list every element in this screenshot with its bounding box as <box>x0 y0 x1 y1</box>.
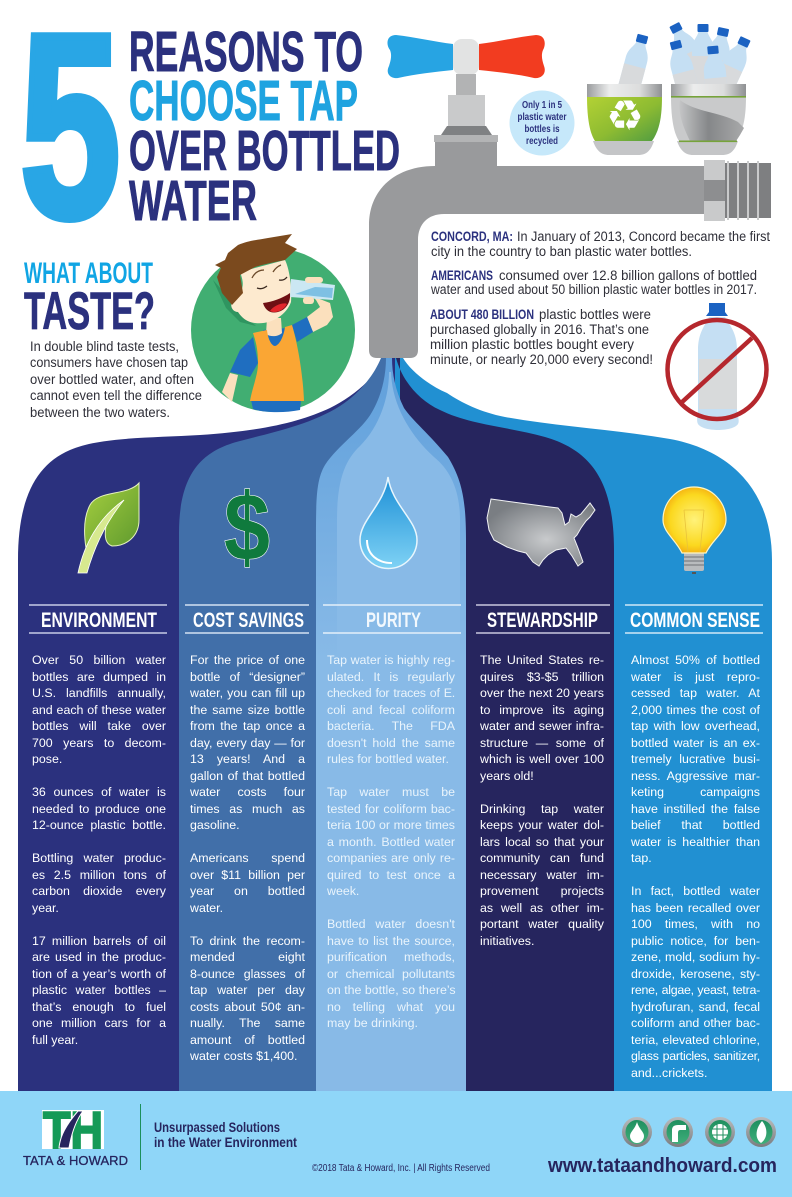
title: WATER <box>129 169 257 233</box>
boy: hair <box>215 234 297 305</box>
heading: purity: PURITY <box>366 608 421 632</box>
text block: cost savings: day, every day — for <box>190 736 305 750</box>
text block: stewardship: The United States re- <box>480 653 604 667</box>
text block: stewardship: lars local so that your <box>480 834 604 848</box>
boy: collar <box>263 328 287 347</box>
text block: purity: quired to test once a <box>327 868 455 882</box>
water stream: environment column <box>18 358 395 1091</box>
heading: stewardship: STEWARDSHIP <box>487 608 598 632</box>
text block: purity: rules for bottled water. <box>327 752 449 766</box>
text block: stewardship: which is well over 100 <box>480 752 604 766</box>
icon: dollar sign: $ <box>224 474 270 581</box>
text block: stewardship: portant water quality <box>480 917 604 931</box>
text block: environment: carbon dioxide every <box>32 884 166 898</box>
text block: cost savings: water costs $1,400. <box>190 1049 297 1063</box>
logo divider <box>140 1104 141 1170</box>
text block: common sense: 2,000 times the cost of <box>631 702 760 716</box>
text block: environment: bottles are dumped in <box>32 670 166 684</box>
text block: purity: Tap water must be <box>327 785 455 799</box>
text block: taste: over bottled water, and often <box>30 372 194 388</box>
logo wordmark: TATA & HOWARD <box>23 1153 128 1168</box>
text block: environment: and each of these water <box>32 702 166 716</box>
tagline <box>154 1119 297 1150</box>
text block: taste <box>30 339 202 421</box>
text block: stewardship <box>480 653 604 948</box>
text block: taste: cannot even tell the difference <box>30 388 202 404</box>
text block: common sense: belief that bottled <box>631 818 760 832</box>
boy: vest <box>250 325 304 401</box>
text block: cost savings: amount of bottled <box>190 1032 305 1046</box>
text block: environment: full year. <box>32 1032 78 1046</box>
text block: common sense: zene, mold, sodium hy- <box>631 950 760 964</box>
heading: stewardship <box>476 605 610 633</box>
boy: sleeves <box>230 337 258 377</box>
icon: pipe badge <box>663 1117 693 1147</box>
text block: cost savings: For the price of one <box>190 653 305 667</box>
text block: common sense: glass particles, sanitizer, <box>631 1049 760 1063</box>
text block: purity: ulated. It is regularly <box>327 670 455 684</box>
water stream: common sense column <box>395 358 772 1091</box>
text block: stewardship: quires $3-$5 trillion <box>480 670 604 684</box>
text block: environment: plastic water bottles – <box>32 983 166 997</box>
text block: stewardship: water and sewer infra- <box>480 719 604 733</box>
text block: environment: one million cars for a <box>32 1016 166 1030</box>
text block: facts <box>430 228 770 368</box>
heading: what about taste <box>24 257 155 341</box>
text block: common sense: hydrofuran, sand, fecal <box>631 1000 760 1014</box>
title <box>129 20 400 233</box>
text block: taste: consumers have chosen tap <box>30 355 188 371</box>
text block: cost savings: costs about 50¢ an- <box>190 1000 305 1014</box>
fact: Americans <box>430 267 757 298</box>
faucet pipe <box>369 142 704 358</box>
fact: about 480 billion: minute, or nearly 20,000 every second! <box>430 352 653 368</box>
heading: what about taste: WHAT ABOUT <box>24 257 153 290</box>
text block: cost savings: nually. The same <box>190 1016 305 1030</box>
footer band <box>0 1091 792 1197</box>
text block: common sense: In fact, bottled water <box>631 884 760 898</box>
text block: environment: 12-ounce plastic bottle. <box>32 818 166 832</box>
text block: purity: Tap water is highly reg- <box>327 653 455 667</box>
callout: only 1 in 5 recycled <box>510 90 574 156</box>
text block: environment <box>32 653 166 1046</box>
text block: common sense: Almost 50% of bottled <box>631 653 760 667</box>
fact: Concord: CONCORD, MA: <box>431 228 513 244</box>
text block: cost savings: gasoline. <box>190 818 240 832</box>
text block: purity: on the bottle, so there’s <box>327 983 456 997</box>
text block: common sense: cessed tap water. At <box>631 686 760 700</box>
text block: common sense: tap with low overhead, <box>631 719 760 733</box>
text block: cost savings: Americans spend <box>190 851 305 865</box>
text block: environment: tion of a year’s worth of <box>32 966 166 980</box>
text block: stewardship: provement projects <box>480 884 604 898</box>
text block: cost savings <box>190 653 306 1063</box>
boy: left arm <box>222 373 238 402</box>
boy: eyes <box>257 277 287 289</box>
text block: cost savings: gallon of that bottled <box>190 768 305 782</box>
text block: purity: purification methods, <box>327 950 455 964</box>
text block: purity: week. <box>327 884 359 898</box>
text block: environment: pose. <box>32 752 62 766</box>
text block: environment: bottles will take over <box>32 719 166 733</box>
text block: purity: Bottled water doesn't <box>327 917 455 931</box>
text block: common sense: water is healthier than <box>631 834 760 848</box>
text block: cost savings: tap water per day <box>190 983 305 997</box>
text block: purity: may be drinking. <box>327 1016 418 1030</box>
text block: stewardship: as well as other im- <box>480 900 604 914</box>
fact: about 480 billion <box>430 306 653 368</box>
text block: common sense: public notice, for ben- <box>631 934 760 948</box>
icon: water drop badge <box>622 1117 652 1147</box>
text block: environment: that’s enough to fuel <box>32 1000 166 1014</box>
text block: common sense: and...crickets. <box>631 1066 707 1080</box>
logo: Tata and Howard <box>23 1102 128 1168</box>
text block: stewardship: years old! <box>480 768 534 782</box>
text block: cost savings: bottle of “designer” <box>190 670 305 684</box>
boy: mouth <box>263 293 290 313</box>
boy: bottom of shirt <box>251 400 301 412</box>
icon: light bulb <box>663 487 726 574</box>
text block: stewardship: keeps your water dol- <box>480 818 604 832</box>
heading: what about taste: TASTE? <box>24 282 155 341</box>
text block: cost savings: the same size bottle <box>190 702 305 716</box>
faucet stem <box>434 74 498 142</box>
heading: environment <box>29 605 167 633</box>
heading: environment: ENVIRONMENT <box>41 608 157 632</box>
text block: cost savings: over $11 billion per <box>190 868 305 882</box>
icon: trash bin with many bottles <box>664 19 756 155</box>
text block: cost savings: water, you can fill up <box>190 686 305 700</box>
text block: common sense: bottled water is an ex- <box>631 736 760 750</box>
service icons <box>622 1117 776 1147</box>
text block: environment: 17 million barrels of oil <box>32 934 166 948</box>
boy: raised arm <box>307 296 333 332</box>
text block: common sense: teria, elevated chlorine, <box>631 1032 760 1046</box>
website: www.tataandhoward.com <box>547 1155 777 1177</box>
tagline: in the Water Environment <box>154 1134 297 1150</box>
title: CHOOSE TAP <box>129 69 358 133</box>
faucet handle <box>388 35 545 78</box>
text block: cost savings: 8-ounce glasses of <box>190 966 305 980</box>
boy: brows <box>252 265 281 278</box>
text block: environment: Over 50 billion water <box>32 653 166 667</box>
text block: common sense <box>631 653 760 1080</box>
text block: common sense: coliform and other bac- <box>631 1016 760 1030</box>
text block: stewardship: Drinking tap water <box>480 802 604 816</box>
icon: USA map <box>487 499 595 566</box>
icon: water drop <box>360 477 417 568</box>
text block: common sense: tremely lucrative busi- <box>631 752 760 766</box>
text block: common sense: rene, algae, yeast, tetra- <box>631 983 760 997</box>
text block: cost savings: water. <box>190 900 223 914</box>
title: OVER BOTTLED <box>129 119 400 183</box>
text block: environment: U.S. landfills annually, <box>32 686 166 700</box>
text block: environment: year. <box>32 900 59 914</box>
text block: cost savings: mended eight <box>190 950 305 964</box>
tagline: Unsurpassed Solutions <box>154 1119 280 1135</box>
text block: cost savings: 13 years! And a <box>190 752 305 766</box>
text block: stewardship: initiatives. <box>480 934 534 948</box>
water stream: stewardship column <box>396 358 614 1091</box>
text block: purity: doesn't hold the same <box>327 736 455 750</box>
icon: no plastic bottles <box>668 303 766 430</box>
text block: environment: es 2.5 million tons of <box>32 868 166 882</box>
text block: purity: bacteria. The FDA <box>327 719 455 733</box>
text block: cost savings: from the tap once a <box>190 719 305 733</box>
callout: only 1 in 5 recycled: recycled <box>526 135 558 147</box>
text block: purity: a month. Bottled water <box>327 834 455 848</box>
text block: purity: or chemical pollutants <box>327 966 455 980</box>
water stream: purity inner highlight <box>337 372 460 1091</box>
callout: only 1 in 5 recycled: bottles is <box>524 123 560 135</box>
icon: globe badge <box>705 1117 735 1147</box>
boy: glass of water <box>290 277 335 304</box>
icon: leaf badge <box>746 1117 776 1147</box>
fact: about 480 billion: ABOUT 480 BILLION <box>430 306 534 322</box>
text block: purity: tested for coliform bac- <box>327 802 455 816</box>
callout: only 1 in 5 recycled: Only 1 in 5 <box>522 99 562 111</box>
text block: taste: between the two waters. <box>30 405 170 421</box>
fact: Concord <box>431 228 770 260</box>
boy: head <box>231 260 291 323</box>
text block: common sense: tap. <box>631 851 652 865</box>
text block: common sense: has been recalled over <box>631 900 760 914</box>
text block: stewardship: necessary water im- <box>480 868 604 882</box>
text block: cost savings: year on bottled <box>190 884 305 898</box>
text block: environment: Bottling water produc- <box>32 851 166 865</box>
heading: cost savings <box>185 605 309 633</box>
text block: environment: 36 ounces of water is <box>32 785 166 799</box>
text block: taste: In double blind taste tests, <box>30 339 179 355</box>
text block: stewardship: structure — some of <box>480 736 604 750</box>
text block: environment: are used in the produc- <box>32 950 166 964</box>
boy: neck <box>266 318 282 336</box>
icon: recycling bin with bottle: ♻ <box>606 91 644 140</box>
copyright: ©2018 Tata & Howard, Inc. | All Rights Reserved <box>312 1163 490 1174</box>
text block: common sense: ness. Aggressive mar- <box>631 768 760 782</box>
text block: environment: needed to produce one <box>32 802 166 816</box>
faucet coupling <box>704 160 771 221</box>
text block: environment: 700 years to decom- <box>32 736 166 750</box>
text block: purity: checked for traces of E. <box>327 686 455 700</box>
fact: Concord: city in the country to ban plastic water bottles. <box>431 244 692 260</box>
text block: purity: coli and fecal coliform <box>327 702 455 716</box>
icon: leaf <box>78 483 139 573</box>
water stream: cost savings column <box>179 358 390 1091</box>
title: REASONS TO <box>129 20 363 84</box>
illustration: boy drinking water <box>191 234 355 412</box>
heading: purity <box>323 605 461 633</box>
boy: drop shadow <box>213 280 256 326</box>
text block: purity <box>327 653 456 1030</box>
faucet <box>369 35 771 358</box>
heading: cost savings: COST SAVINGS <box>193 608 304 632</box>
text block: common sense: have instilled the false <box>631 802 760 816</box>
text block: stewardship: community can fund <box>480 851 604 865</box>
text block: purity: companies are only re- <box>327 851 455 865</box>
fact: about 480 billion: million plastic bottles bought every <box>430 337 635 353</box>
water stream: purity column <box>316 358 466 1091</box>
fact: about 480 billion: purchased globally in 2016. That’s one <box>430 322 649 338</box>
text block: cost savings: To drink the recom- <box>190 934 305 948</box>
text block: purity: teria 100 or more times <box>327 818 455 832</box>
text block: cost savings: water costs four <box>190 785 305 799</box>
logo mark: TH <box>43 1102 103 1160</box>
text block: common sense: 100 times, with no <box>631 917 760 931</box>
text block: common sense: water is just repro- <box>631 670 760 684</box>
text block: purity: have to list the source, <box>327 934 455 948</box>
icon: recycling bin with bottle <box>587 32 662 155</box>
text block: common sense: droxide, kerosene, sty- <box>631 966 760 980</box>
fact: about 480 billion: plastic bottles were <box>539 307 651 323</box>
text block: stewardship: over the next 20 years <box>480 686 604 700</box>
text block: common sense: keting campaigns <box>631 785 760 799</box>
fact: Americans: consumed over 12.8 billion gallons of bottled <box>499 268 757 284</box>
fact: Americans: AMERICANS <box>431 267 493 283</box>
text block: purity: no telling what you <box>327 1000 455 1014</box>
callout: only 1 in 5 recycled: plastic water <box>518 111 566 123</box>
text block: stewardship: to improve its aging <box>480 702 604 716</box>
text block: cost savings: times as much as <box>190 802 305 816</box>
